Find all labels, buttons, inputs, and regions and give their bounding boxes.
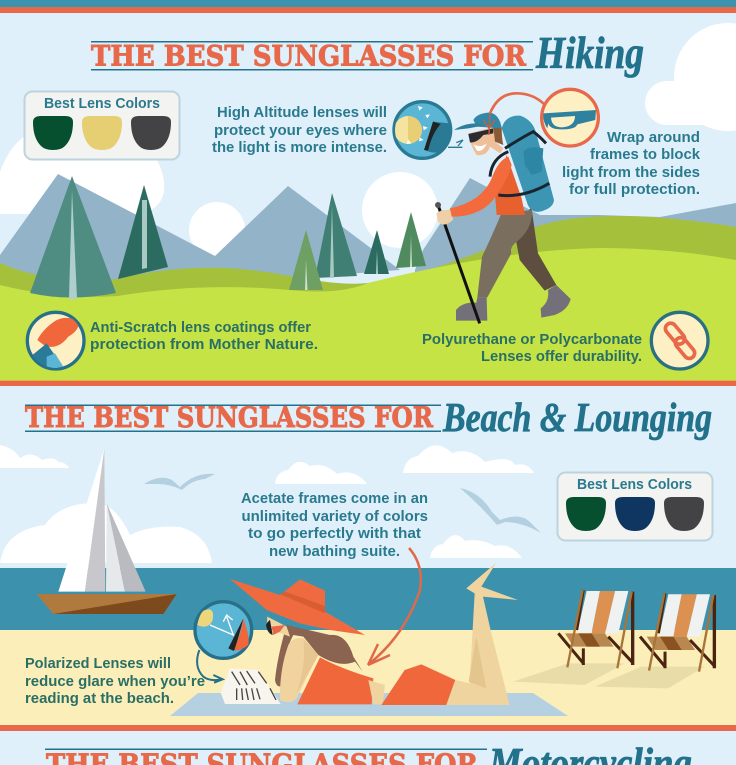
text: polarized: reduce glare when you’re: [25, 674, 205, 690]
heading: hiking: [91, 28, 644, 78]
text: polarized: Polarized Lenses will: [25, 656, 171, 672]
text: polarized: reading at the beach.: [25, 691, 174, 707]
text: wrap around: [562, 130, 701, 198]
hat: [230, 579, 365, 635]
lens colors box: [558, 472, 712, 540]
hand: [436, 210, 453, 225]
icon: polarized lens: [195, 602, 252, 683]
text: anti-scratch: protection from Mother Nature.: [90, 337, 318, 353]
text: acetate: Acetate frames come in an: [241, 491, 428, 507]
panel: hiking: [0, 23, 736, 380]
seagull right: [460, 488, 541, 533]
arm: [450, 157, 512, 217]
head: [454, 112, 503, 155]
hiker lower body: [435, 202, 571, 323]
connector arc: [490, 93, 545, 113]
text: high altitude: [212, 105, 387, 156]
hair: [275, 625, 363, 687]
text: anti-scratch: Anti-Scratch lens coatings offer: [90, 320, 311, 336]
icon: chain link: [651, 312, 708, 369]
panel: beach: [0, 386, 736, 725]
book: [221, 668, 281, 704]
straps: [490, 132, 549, 196]
icon: high altitude lens: [394, 102, 463, 158]
section background: [0, 386, 736, 725]
heading: hiking: THE BEST SUNGLASSES FOR: [91, 40, 527, 72]
text: polyurethane: Polyurethane or Polycarbonate: [422, 332, 642, 348]
hills: [0, 216, 736, 380]
text: high altitude: the light is more intense.: [212, 140, 387, 156]
text: anti-scratch: [90, 320, 318, 353]
heading: hiking: Hiking: [535, 28, 644, 78]
text: polarized: [25, 656, 205, 707]
sailboat: [37, 448, 177, 614]
text: acetate: [241, 491, 428, 560]
top banner: [0, 0, 736, 13]
divider: [0, 725, 736, 731]
lens colors box: Best Lens Colors: [44, 96, 160, 112]
text: high altitude: protect your eyes where: [214, 123, 387, 139]
woman upper body and book: [221, 579, 385, 704]
sand: [0, 630, 736, 725]
lens colors box: Best Lens Colors: [577, 477, 692, 493]
back boot: [541, 285, 571, 318]
sea: [0, 568, 736, 630]
text: polyurethane: [422, 332, 642, 365]
arrow: acetate to swimsuit: [368, 548, 421, 665]
back leg: [515, 207, 556, 291]
pole: [435, 202, 480, 323]
orange top: [297, 657, 373, 704]
text: wrap around: Wrap around: [607, 130, 700, 146]
trees: [30, 176, 426, 299]
seagull left: [144, 474, 215, 490]
front boot: [456, 297, 487, 321]
lens colors box: [24, 92, 180, 160]
text: high altitude: High Altitude lenses will: [217, 105, 387, 121]
towel: [170, 693, 568, 716]
text: acetate: unlimited variety of colors: [242, 509, 428, 525]
arm: [280, 638, 318, 702]
orange bottoms and leg: [381, 563, 518, 705]
mountains: [0, 174, 736, 300]
icon: wrap around glasses: [542, 89, 598, 146]
beach chair: [640, 593, 715, 672]
chair shadows: [513, 663, 705, 688]
heading: motorcycling: [45, 741, 692, 765]
divider: [0, 380, 736, 386]
backpack: [502, 116, 554, 212]
hiker upper body: [450, 89, 598, 217]
text: acetate: to go perfectly with that: [248, 526, 421, 542]
beach chair: [558, 590, 633, 668]
heading: beach: [25, 394, 712, 440]
sunglasses: [266, 620, 285, 635]
front leg: [477, 210, 532, 297]
skin strip: [368, 680, 385, 704]
text: polyurethane: Lenses offer durability.: [481, 349, 642, 365]
text: acetate: new bathing suite.: [269, 544, 400, 560]
face: [267, 617, 290, 637]
clouds: [0, 23, 736, 258]
heading: beach: THE BEST SUNGLASSES FOR: [25, 401, 434, 434]
icon: scratch resistant lens: [27, 312, 84, 370]
text: wrap around: for full protection.: [569, 182, 700, 198]
clouds: [0, 445, 534, 563]
text: wrap around: frames to block: [590, 147, 701, 163]
torso: [495, 155, 525, 215]
text: wrap around: light from the sides: [562, 165, 700, 181]
